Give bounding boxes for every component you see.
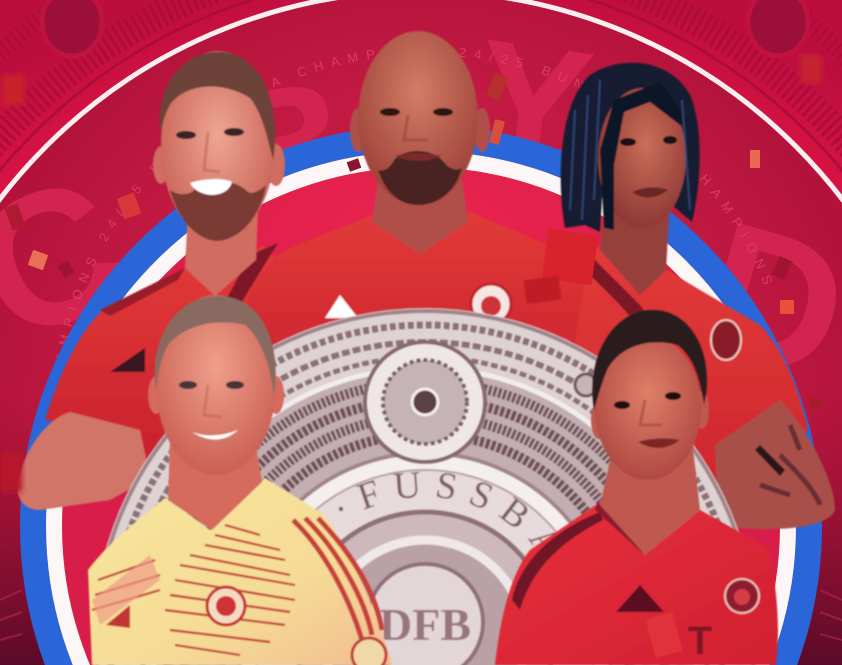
Meisterschale trophy	[93, 307, 756, 665]
nose	[640, 400, 662, 425]
jersey pink panel	[92, 555, 160, 625]
player: goalkeeper	[88, 295, 392, 665]
faded background lettering: B	[209, 43, 363, 251]
crest	[725, 579, 759, 613]
inner ring	[238, 453, 612, 665]
chest stripes	[92, 525, 295, 655]
adidas mark	[616, 585, 664, 612]
stadium stripes	[0, 590, 842, 640]
blue and white ring	[33, 138, 809, 665]
face	[598, 88, 686, 228]
ears	[350, 108, 366, 152]
small circular slogan: CHAMPIONS 24/25 BUNDESLIGA CHAMPIONS 24/25 BUNDESLIGA CHAMPIONS	[56, 48, 772, 358]
centre monogram disc: DFB	[379, 599, 471, 650]
sponsor T: T	[688, 619, 712, 663]
faded background lettering: A	[340, 27, 463, 217]
forearm	[715, 400, 835, 529]
centre monogram disc	[367, 564, 483, 665]
neck	[185, 210, 258, 296]
eyes and mouth	[380, 108, 400, 116]
shirt	[576, 246, 809, 480]
beard	[170, 181, 266, 241]
FUSSBALL lettering: R·FUSSBAL	[338, 471, 556, 546]
head	[358, 31, 478, 205]
hair highlights	[570, 80, 690, 220]
eyes and smile	[179, 381, 197, 389]
ears	[148, 376, 164, 414]
neck	[600, 440, 700, 555]
shirt	[44, 245, 276, 459]
shirt	[276, 212, 584, 344]
hair	[159, 52, 275, 160]
neck	[600, 212, 670, 296]
names field	[153, 368, 697, 665]
inner dish	[297, 512, 553, 665]
sleeve badge	[352, 638, 386, 665]
faded background lettering	[0, 3, 842, 422]
crest	[711, 320, 741, 360]
player: right front	[495, 310, 778, 665]
jersey	[495, 502, 778, 665]
dark lower band	[0, 441, 842, 665]
neck	[168, 440, 262, 530]
engraved champion bands	[110, 325, 740, 665]
nose	[404, 115, 428, 140]
outer background	[0, 0, 842, 194]
logo stripes	[325, 295, 358, 318]
crest	[471, 284, 511, 324]
player: left back	[17, 50, 286, 511]
jersey	[88, 478, 392, 665]
hair	[155, 296, 276, 395]
faded background lettering: Y	[463, 3, 602, 207]
outer engraved plate pattern	[0, 0, 842, 172]
crest	[207, 587, 245, 625]
adidas mark	[106, 605, 130, 628]
head	[156, 295, 276, 475]
beard	[378, 151, 462, 205]
right rivet	[575, 374, 597, 396]
head	[595, 336, 701, 480]
ears	[591, 401, 607, 439]
eyes and mouth	[620, 138, 636, 146]
top medallion	[365, 342, 485, 462]
dreadlocks back	[561, 63, 700, 232]
head	[160, 50, 272, 222]
nose	[204, 385, 222, 417]
sleeve stripes	[512, 512, 603, 610]
player: centre coach	[276, 30, 584, 344]
ears	[153, 146, 169, 184]
wrist band	[755, 445, 785, 476]
neck	[372, 180, 468, 254]
eyes and mouth	[614, 401, 630, 409]
hair	[592, 310, 707, 410]
front locks	[600, 82, 688, 230]
nose	[204, 132, 220, 172]
forearm	[17, 412, 150, 510]
player: right forward	[561, 63, 835, 560]
outer plate	[93, 308, 757, 665]
eyes and smile	[176, 131, 196, 139]
sleeve stripes	[293, 518, 382, 640]
